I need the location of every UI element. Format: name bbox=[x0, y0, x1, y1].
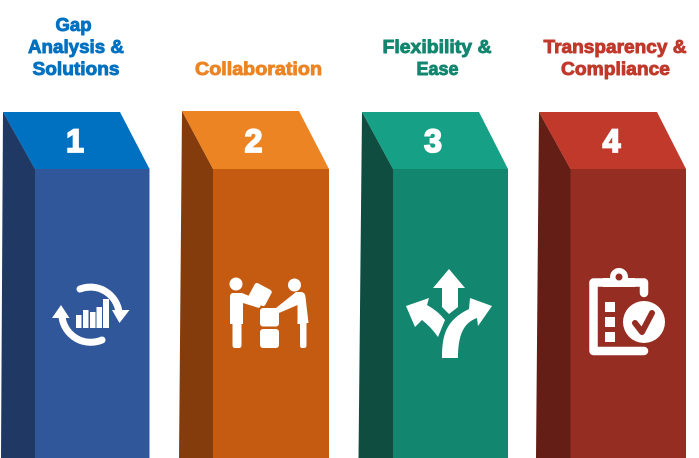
number 1: 1 bbox=[66, 123, 84, 159]
heading: Transparency & Compliance: Transparency & bbox=[544, 36, 686, 57]
heading: Flexibility & Ease bbox=[382, 36, 492, 79]
heading: Gap Analysis & Solutions: Solutions bbox=[32, 58, 120, 79]
icon: two people stacking blocks bbox=[230, 278, 308, 348]
panel: column 4 bbox=[536, 112, 686, 458]
panel: column 2 bbox=[179, 111, 329, 458]
number 3: 3 bbox=[424, 123, 442, 159]
heading: Flexibility & Ease: Ease bbox=[416, 58, 458, 79]
heading: Gap Analysis & Solutions: Analysis & bbox=[28, 36, 124, 57]
icon: three-way arrows bbox=[406, 269, 492, 358]
heading: Flexibility & Ease: Flexibility & bbox=[382, 36, 492, 57]
heading: Transparency & Compliance: Compliance bbox=[561, 58, 670, 79]
number 2: 2 bbox=[245, 123, 262, 159]
panel: column 1 bbox=[1, 112, 150, 458]
heading: Gap Analysis & Solutions bbox=[28, 14, 124, 79]
heading: Collaboration: Collaboration bbox=[195, 58, 322, 79]
icon: clipboard with check bbox=[594, 268, 667, 351]
heading: Gap Analysis & Solutions: Gap bbox=[56, 14, 92, 35]
panel: column 3 bbox=[358, 112, 508, 458]
icon: analysis cycle with bars bbox=[52, 287, 130, 342]
heading: Transparency & Compliance bbox=[544, 36, 686, 79]
number 4: 4 bbox=[603, 123, 621, 159]
